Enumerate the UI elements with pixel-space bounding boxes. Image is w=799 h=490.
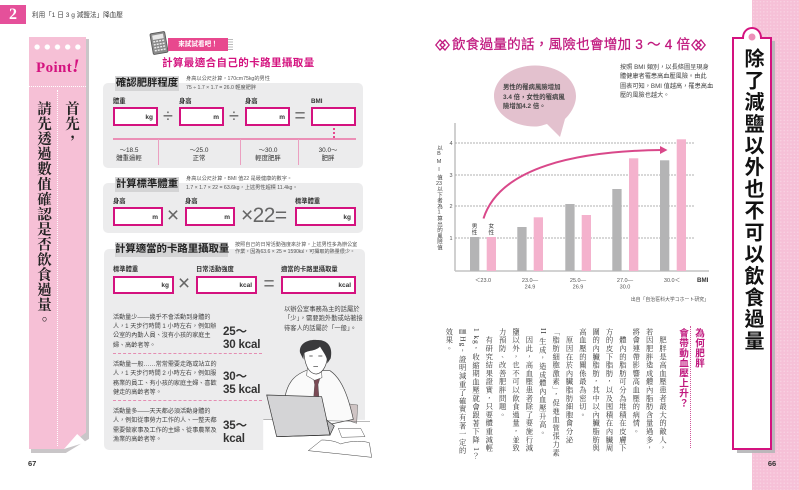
heading: calorie calculation: 計算最適合自己的卡路里攝取量 xyxy=(162,57,315,69)
height label one: 身高 xyxy=(179,98,192,105)
intake box xyxy=(281,276,356,294)
axes xyxy=(455,123,709,271)
body text: vertical article: 體內的脂肪可分為堆積在皮膚下 xyxy=(619,336,628,452)
chair xyxy=(348,404,358,423)
moderate description xyxy=(113,360,217,396)
male and female bar labels: 性 xyxy=(472,228,478,236)
equals sign: = xyxy=(263,274,275,295)
note: calorie intake: 作業，因為63.6 × 25 = 1590㎉，可攝取的熱量很少。 xyxy=(235,249,355,255)
scale: underweight: ～18.5 xyxy=(120,147,138,154)
heading tag: standard weight: 計算標準體重 xyxy=(116,179,178,190)
high value xyxy=(223,419,247,445)
male and female bar labels: 性 xyxy=(488,228,494,236)
chapter number badge: 2 xyxy=(9,6,17,23)
high description: 需要做家事及工作的主婦、從事農業及 xyxy=(113,427,217,434)
text: chart explanation: 壓的風險也越大。 xyxy=(620,92,670,99)
x axis labels: 30.0＜ xyxy=(664,278,680,284)
note: standard weight: 身高以公尺計算，BMI 值22 是最健康的數字。 xyxy=(186,176,292,182)
BMI scale xyxy=(113,138,356,165)
x axis labels: 27.0— xyxy=(617,278,634,284)
high value: kcal xyxy=(223,432,245,445)
point label: Point! xyxy=(36,56,80,77)
standard weight box xyxy=(113,276,174,294)
x axis labels xyxy=(475,278,680,290)
activity label: 日常活動強度 xyxy=(196,266,234,273)
panel: point sidebar xyxy=(29,37,89,453)
hair xyxy=(300,340,331,363)
body text: vertical article: 肥胖是高血壓患者最大的敵人， xyxy=(659,336,668,452)
standard weight label: 標準體重 xyxy=(113,266,138,273)
lead text column two: 請先透過數值確認是否飲食過量。 xyxy=(35,101,51,328)
chart: hypertension risk by BMI xyxy=(449,123,709,303)
y axis numbers: 2 xyxy=(449,204,453,210)
body text: vertical article: 因此，高血壓患者除了要施行減 xyxy=(525,336,534,452)
heading: why obesity raises blood pressure xyxy=(677,326,705,448)
body text: vertical article: 方的皮下脂肪，以及囤積在內臟周 xyxy=(606,328,615,452)
male bars xyxy=(470,160,669,271)
x axis labels: 23.0— xyxy=(522,278,539,284)
weight box: kg xyxy=(145,114,153,121)
source: 出自「自治医科大学コホート研究」 xyxy=(631,296,709,303)
low description xyxy=(113,314,216,349)
paper xyxy=(338,428,365,437)
page number 67: 67 xyxy=(28,459,36,468)
laptop screen xyxy=(267,395,330,437)
tie xyxy=(313,377,320,398)
body text: vertical article: ㎜Hg，證明減重了確實有著一定的 xyxy=(459,328,468,455)
body text: vertical article: 高血壓的關係最為密切。 xyxy=(579,328,588,419)
low value: 30 kcal xyxy=(223,338,260,351)
heading line two: 會帶動血壓上升？ xyxy=(677,328,688,408)
scale: mild obesity: ～30.0 xyxy=(259,147,277,154)
high description xyxy=(113,408,217,443)
weight label: 體重 xyxy=(113,98,126,105)
heading text: 飲食過量的話，風險也會增加 3 ～ 4 倍 xyxy=(452,37,690,52)
table line xyxy=(263,419,370,422)
heading line one: 為何肥胖 xyxy=(693,328,704,368)
multiply sign: × xyxy=(178,272,190,295)
icon: double diamond left xyxy=(435,39,450,51)
laptop base xyxy=(277,420,334,437)
right page pink side band xyxy=(752,0,799,490)
height label one: 身高 xyxy=(113,198,126,205)
scale: mild obesity: 輕度肥胖 xyxy=(255,155,281,162)
scale: obesity xyxy=(318,147,338,162)
eyes and mouth xyxy=(309,356,322,367)
bubble text: 3.4 倍，女性的罹病風 xyxy=(503,94,565,101)
activity level: moderate xyxy=(113,360,260,396)
note: office worker advice xyxy=(284,306,363,332)
dotted rule vertical xyxy=(57,90,58,446)
scale: obesity: 30.0～ xyxy=(319,147,337,154)
weight box xyxy=(113,107,158,126)
equals sign: = xyxy=(294,106,306,127)
text: chart explanation: 按照 BMI 類別，以長條圖呈現身 xyxy=(620,64,709,71)
height box one: m xyxy=(213,114,219,121)
height label two: 身高 xyxy=(245,98,258,105)
height box one xyxy=(179,107,224,126)
moderate value xyxy=(223,370,260,396)
body text: vertical article: 力預防、改善肥胖問題。 xyxy=(499,328,508,419)
height box one xyxy=(113,207,163,226)
illustration: man at laptop xyxy=(263,340,372,458)
moderate value: 30～ xyxy=(223,370,247,383)
body text: vertical article: 圍的內臟脂肪，其中以內臟脂肪與 xyxy=(592,328,601,452)
heading tag: calorie intake: 計算適當的卡路里攝取量 xyxy=(115,244,229,255)
banner label xyxy=(168,38,228,51)
icon: calculator xyxy=(150,31,168,55)
note: standard weight xyxy=(186,175,298,190)
divide sign two: ÷ xyxy=(229,106,239,126)
scale: underweight: 體重過輕 xyxy=(116,155,142,162)
note: obesity example: 75 ÷ 1.7 × 1.7 = 26.0 輕度肥胖 xyxy=(186,85,256,91)
top dots xyxy=(32,44,83,50)
folded corner xyxy=(64,434,86,449)
height label two: 身高 xyxy=(185,198,198,205)
text: chart explanation: 圖表可知，BMI 值越高，罹患高血 xyxy=(620,83,713,90)
tag title text: 除了減鹽以外也不可以飲食過量 xyxy=(741,48,763,352)
face xyxy=(304,345,328,374)
male and female bar labels: 女 xyxy=(488,222,494,230)
moderate description: 活動量一般……常常需要走路或站立的 xyxy=(113,361,217,368)
page number 66: 66 xyxy=(768,459,776,468)
standard weight box xyxy=(295,207,356,226)
high description: 漁業的高齡者等。 xyxy=(113,436,162,443)
banner: try it xyxy=(168,38,233,51)
panel: calorie intake xyxy=(104,249,365,450)
arrow: rising risk xyxy=(484,146,668,218)
high description: 人，例如從事勞力工作的人、一整天都 xyxy=(113,417,217,424)
male and female bar labels xyxy=(472,222,494,236)
running header: 利用「1 日 3 g 減鹽法」降血壓 xyxy=(32,12,123,19)
note: calorie intake xyxy=(235,241,357,255)
bubble text xyxy=(503,83,565,110)
standard weight box: kg xyxy=(161,282,169,289)
text: chart explanation xyxy=(620,64,713,99)
x axis labels: 26.9 xyxy=(573,284,583,290)
note: office worker advice: 「少」，需要跑外勤或站著接 xyxy=(284,315,363,322)
low description: 公室的內勤人員、沒有小孩的家庭主 xyxy=(113,332,210,339)
activity level: high xyxy=(113,408,247,445)
activity level: low xyxy=(113,314,260,351)
standard weight label: 標準體重 xyxy=(295,198,320,205)
low value: 25～ xyxy=(223,325,247,338)
activity box: kcal xyxy=(239,282,252,289)
scale: normal xyxy=(190,147,208,162)
y axis numbers: 1 xyxy=(449,236,453,242)
divide sign one: ÷ xyxy=(163,106,173,126)
heading tag: check obesity: 確認肥胖程度 xyxy=(116,78,178,89)
callout: risk speech bubble xyxy=(494,66,576,137)
scale rule xyxy=(113,138,356,140)
bubble shape xyxy=(494,66,576,137)
standard weight box: kg xyxy=(343,214,351,221)
BMI label: BMI xyxy=(311,98,323,105)
body text: vertical article: 原因在於內臟脂肪細胞會分泌 xyxy=(565,336,574,444)
scale: mild obesity xyxy=(255,147,281,162)
torso xyxy=(285,370,353,425)
scale: normal: 正常 xyxy=(193,155,205,162)
book xyxy=(308,440,372,457)
y axis numbers xyxy=(449,141,453,242)
scale: obesity: 肥胖 xyxy=(322,155,334,162)
low value xyxy=(223,325,260,351)
height box two: m xyxy=(279,114,285,121)
tag: chapter side title xyxy=(732,27,775,453)
activity box xyxy=(196,276,257,294)
body text: vertical article: 有研究結果證實，只要體重減輕 xyxy=(485,336,494,452)
intake label: 適當的卡路里攝取量 xyxy=(281,266,338,273)
note: office worker advice: 以辦公室事務為主的話屬於 xyxy=(284,306,360,313)
body text: vertical article: 效果。 xyxy=(445,328,454,353)
low description: 人，1 天步行時間 1 小時左右，例如辦 xyxy=(113,323,216,330)
scale: underweight xyxy=(116,147,142,162)
x axis labels: 24.9 xyxy=(525,284,535,290)
form row: BMI formula xyxy=(113,97,356,127)
moderate description: 務業的員工、有小孩的家庭主婦、喜歡 xyxy=(113,380,217,387)
form row: calorie formula xyxy=(113,265,356,295)
body text: vertical article: 若因肥胖造成體內脂肪含量過多， xyxy=(646,328,655,452)
panel: check obesity level xyxy=(103,83,363,168)
icon: double diamond right xyxy=(691,39,706,51)
high description: 活動量多——天天都必須活動身體的 xyxy=(113,408,210,415)
low description: 活動量少——幾乎不會活動到身體的 xyxy=(113,314,210,321)
note: obesity example: 身高以公尺計算，170cm75kg的男性 xyxy=(186,76,270,82)
body text: vertical article: 1 kg，收縮期血壓就會跟著下降 1？ xyxy=(472,328,481,460)
height box two: m xyxy=(224,214,230,221)
x axis labels: 25.0— xyxy=(570,278,587,284)
y axis title: 以 BMI 值 23 以下者為1算出的風險值 xyxy=(436,145,442,250)
low description: 婦、高齡者等。 xyxy=(113,342,156,349)
bubble text: 險增加4.2 倍。 xyxy=(503,103,546,110)
body text: vertical article: 將會連帶影響高血壓的病情。 xyxy=(632,328,641,436)
male and female bar labels: 男 xyxy=(472,223,477,230)
bubble text: 男性的罹病風險增加 xyxy=(503,84,561,91)
dotted rule horizontal xyxy=(29,86,86,87)
body text: vertical article xyxy=(445,328,668,460)
body text: vertical article: II 生成，造成體內血壓升高。 xyxy=(539,328,548,437)
note: obesity example xyxy=(186,76,270,91)
dashed divider one xyxy=(113,353,262,354)
lead text column one: 首先， xyxy=(63,101,79,146)
moderate description: 健走的高齡者等。 xyxy=(113,389,162,396)
banner stripes xyxy=(226,39,233,50)
times 22 equals: ×22= xyxy=(241,204,286,227)
intake box: kcal xyxy=(338,282,351,289)
neck xyxy=(307,368,322,380)
height box two xyxy=(245,107,290,126)
body text: vertical article: 鹽以外，也不可以飲食過量，並致 xyxy=(512,328,521,452)
tag shape xyxy=(732,27,775,453)
BMI box xyxy=(311,107,356,126)
scale dividers xyxy=(158,139,356,165)
note: standard weight: 1.7 × 1.7 × 22 = 63.6kg，上述男性超標 11.4kg。 xyxy=(186,184,298,190)
multiply sign: × xyxy=(167,204,179,227)
moderate description: 人，1 天步行時間 2 小時左右，例如服 xyxy=(113,370,216,377)
height box one: m xyxy=(152,214,158,221)
text: chart explanation: 體健康者罹患高血壓風險。由此 xyxy=(620,73,707,80)
height box two xyxy=(185,207,235,226)
banner label: 來試試看吧！ xyxy=(178,41,218,48)
panel: standard weight xyxy=(103,183,363,233)
female bars xyxy=(487,139,686,271)
dotted rule xyxy=(690,326,691,448)
panel shadow xyxy=(31,39,89,453)
x axis labels: 30.0 xyxy=(620,284,630,290)
dashed divider two xyxy=(113,400,262,401)
scale: normal: ～25.0 xyxy=(190,147,208,154)
body text: vertical article: 「脂肪細胞激素」，促進血管張力素 xyxy=(552,328,561,457)
note: office worker advice: 待客人的話屬於「一般」。 xyxy=(284,325,356,332)
y axis numbers: 3 xyxy=(449,173,453,179)
x axis labels: ＜23.0 xyxy=(475,278,491,284)
x axis title: BMI xyxy=(697,277,709,284)
high value: 35～ xyxy=(223,419,247,432)
moderate value: 35 kcal xyxy=(223,383,260,396)
note: calorie intake: 按照自己的日常活動強度來計算，上述男性多為辦公室 xyxy=(235,242,357,248)
form row: standard weight formula xyxy=(113,197,356,227)
y axis numbers: 4 xyxy=(449,141,453,147)
panel pink background xyxy=(29,37,86,449)
chapter number badge xyxy=(0,5,26,24)
dotted pointer from BMI box xyxy=(333,128,335,138)
heading: overeating raises risk xyxy=(435,37,706,52)
